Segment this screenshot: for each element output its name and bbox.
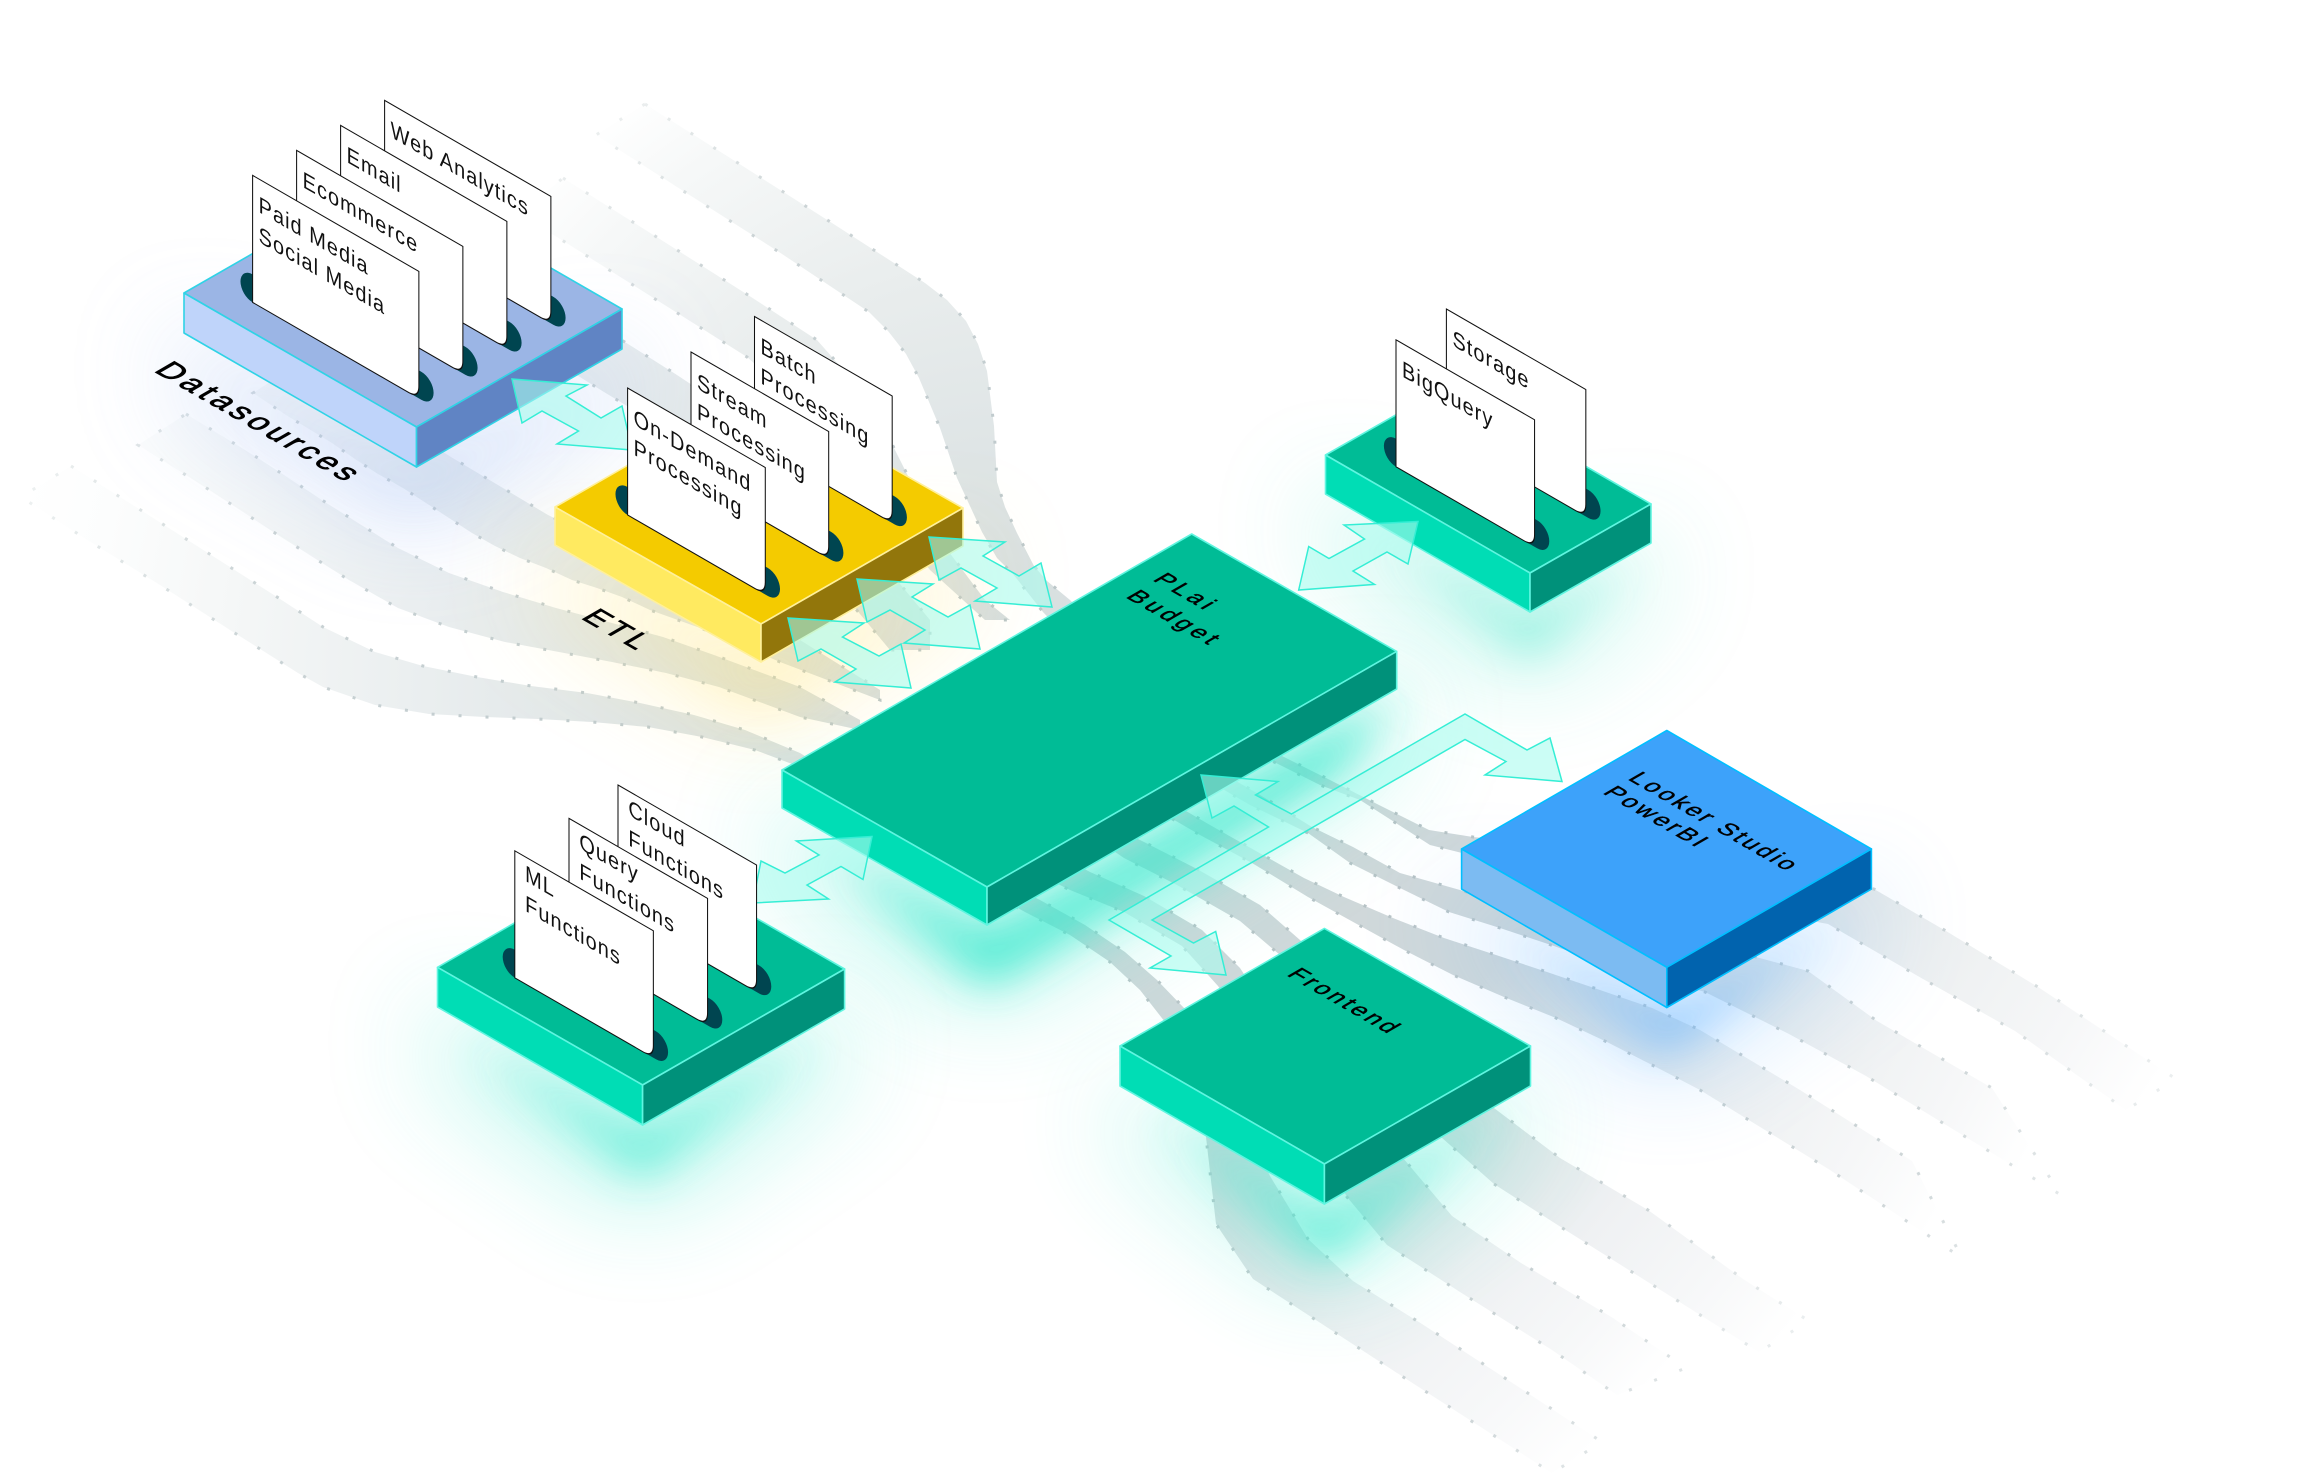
- card: query functions: Functions: [579, 857, 675, 939]
- card: ml functions: Functions: [525, 890, 621, 971]
- data flow ribbons: frontend: [985, 820, 1809, 1473]
- card: bigquery: [1396, 340, 1537, 548]
- card: ecommerce: Ecommerce: [303, 166, 418, 259]
- panel: functions block: [438, 851, 845, 1125]
- card: on-demand processing: On-Demand: [634, 403, 751, 498]
- card: on-demand processing: Processing: [634, 433, 743, 522]
- panel: storage block: [1326, 386, 1651, 612]
- card: cloud functions: Functions: [628, 824, 724, 905]
- arrow: functions to plai: [753, 836, 872, 903]
- glow: etl: [555, 545, 963, 710]
- arrow: datasources to etl: [512, 379, 632, 450]
- panel: looker studio block: [1462, 730, 1871, 1008]
- card: storage: [1446, 309, 1588, 518]
- glow: plai budget: [782, 689, 1396, 1000]
- glow: frontend: [1120, 1086, 1530, 1280]
- card: on-demand processing: [628, 388, 768, 596]
- label: looker studio and powerbi: Looker Studio: [1622, 768, 1807, 876]
- panel: frontend block: [1120, 928, 1530, 1204]
- arrow: plai to looker and frontend: [1109, 714, 1562, 975]
- card: email: [341, 125, 509, 350]
- glow: functions: [437, 1007, 844, 1200]
- data flow ribbons: right: [1140, 740, 2176, 1258]
- card: batch processing: [754, 316, 895, 524]
- card: batch processing: Processing: [761, 362, 869, 451]
- arrow: etl to plai 3: [929, 537, 1052, 607]
- label: etl: ETL: [574, 604, 664, 656]
- card: query functions: Query: [579, 827, 639, 888]
- card: ml functions: [515, 851, 656, 1059]
- panel: datasources cards: [253, 100, 553, 400]
- card: ml functions: ML: [525, 860, 555, 903]
- card: stream processing: Stream: [697, 367, 767, 434]
- arrow: etl to plai 2: [857, 579, 980, 649]
- arrow: etl to plai 1: [788, 618, 911, 688]
- card: stream processing: Processing: [697, 397, 806, 486]
- panel: functions cards: [515, 785, 759, 1059]
- panel: storage cards: [1396, 309, 1588, 548]
- label: datasources: Datasources: [147, 356, 374, 487]
- panel: plai budget block: [782, 534, 1397, 925]
- card: email: Email: [347, 141, 402, 199]
- data flow ribbons: left: [21, 104, 1090, 805]
- card: stream processing: [691, 352, 831, 560]
- panel: datasources block: [184, 175, 622, 467]
- label: looker studio and powerbi: PowerBI: [1597, 782, 1717, 852]
- label: plai budget: Budget: [1120, 586, 1230, 650]
- label: frontend: Frontend: [1281, 964, 1409, 1038]
- card: web analytics: Web Analytics: [391, 116, 529, 222]
- card: bigquery: BigQuery: [1402, 355, 1493, 434]
- card: paid and social media: Social Media: [259, 221, 385, 320]
- card: cloud functions: Cloud: [628, 794, 686, 853]
- card: paid and social media: [253, 175, 421, 400]
- glow: looker: [1461, 889, 1871, 1070]
- panel: etl cards: [628, 316, 895, 596]
- card: web analytics: [385, 100, 553, 325]
- card: cloud functions: [618, 785, 759, 994]
- card: paid and social media: Paid Media: [259, 191, 369, 280]
- panel: etl block: [555, 391, 963, 662]
- label: plai budget: PLai: [1147, 569, 1226, 615]
- arrow: plai to storage: [1299, 522, 1418, 590]
- glow: datasources: [184, 333, 622, 520]
- card: ecommerce: [297, 150, 465, 375]
- card: storage: Storage: [1452, 324, 1529, 395]
- card: query functions: [569, 818, 710, 1027]
- card: batch processing: Batch: [761, 332, 817, 390]
- glow: storage: [1325, 494, 1651, 670]
